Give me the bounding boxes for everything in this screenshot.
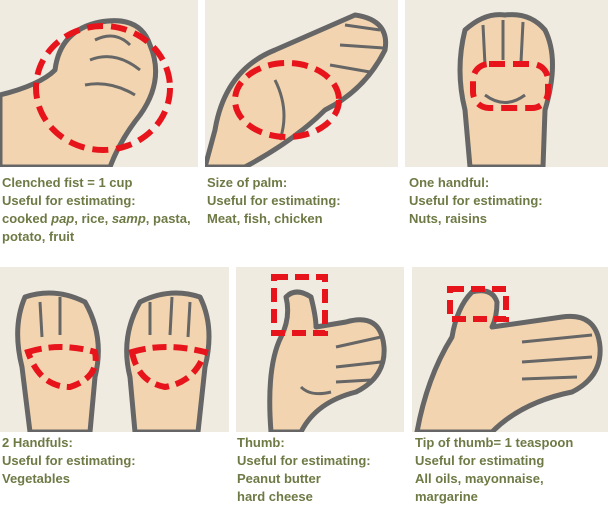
text: two handfuls: Vegetables xyxy=(2,471,70,486)
text: tip of thumb: Tip of thumb= 1 teaspoon xyxy=(415,435,573,450)
text: one handful: Useful for estimating: xyxy=(409,193,543,208)
text: two handfuls xyxy=(2,435,136,486)
panel: thumb xyxy=(236,267,404,432)
text: palm: Size of palm: xyxy=(207,175,287,190)
text: clenched fist: cooked pap, rice, samp, pasta, xyxy=(2,211,191,226)
text: two handfuls: 2 Handfuls: xyxy=(2,435,73,450)
panel: clenched fist xyxy=(0,0,198,167)
text: palm: Useful for estimating: xyxy=(207,193,341,208)
text: thumb xyxy=(237,435,371,504)
text: two handfuls: Useful for estimating: xyxy=(2,453,136,468)
text: one handful: Nuts, raisins xyxy=(409,211,487,226)
panel: palm xyxy=(205,0,398,167)
text: tip of thumb: margarine xyxy=(415,489,478,504)
text: one handful: One handful: xyxy=(409,175,489,190)
panel: one handful xyxy=(405,0,608,167)
text: thumb: Useful for estimating: xyxy=(237,453,371,468)
text: palm xyxy=(207,175,341,226)
text: clenched fist: Useful for estimating: xyxy=(2,193,136,208)
text: tip of thumb: All oils, mayonnaise, xyxy=(415,471,544,486)
text: clenched fist: Clenched fist = 1 cup xyxy=(2,175,132,190)
panel: two handfuls xyxy=(0,267,229,432)
text: thumb: Thumb: xyxy=(237,435,285,450)
text: one handful xyxy=(409,175,543,226)
text: clenched fist: potato, fruit xyxy=(2,229,74,244)
text: thumb: hard cheese xyxy=(237,489,313,504)
text: tip of thumb xyxy=(415,435,573,504)
text: clenched fist xyxy=(2,175,191,244)
text: thumb: Peanut butter xyxy=(237,471,321,486)
text: tip of thumb: Useful for estimating xyxy=(415,453,544,468)
text: palm: Meat, fish, chicken xyxy=(207,211,323,226)
panel: tip of thumb xyxy=(412,267,608,432)
